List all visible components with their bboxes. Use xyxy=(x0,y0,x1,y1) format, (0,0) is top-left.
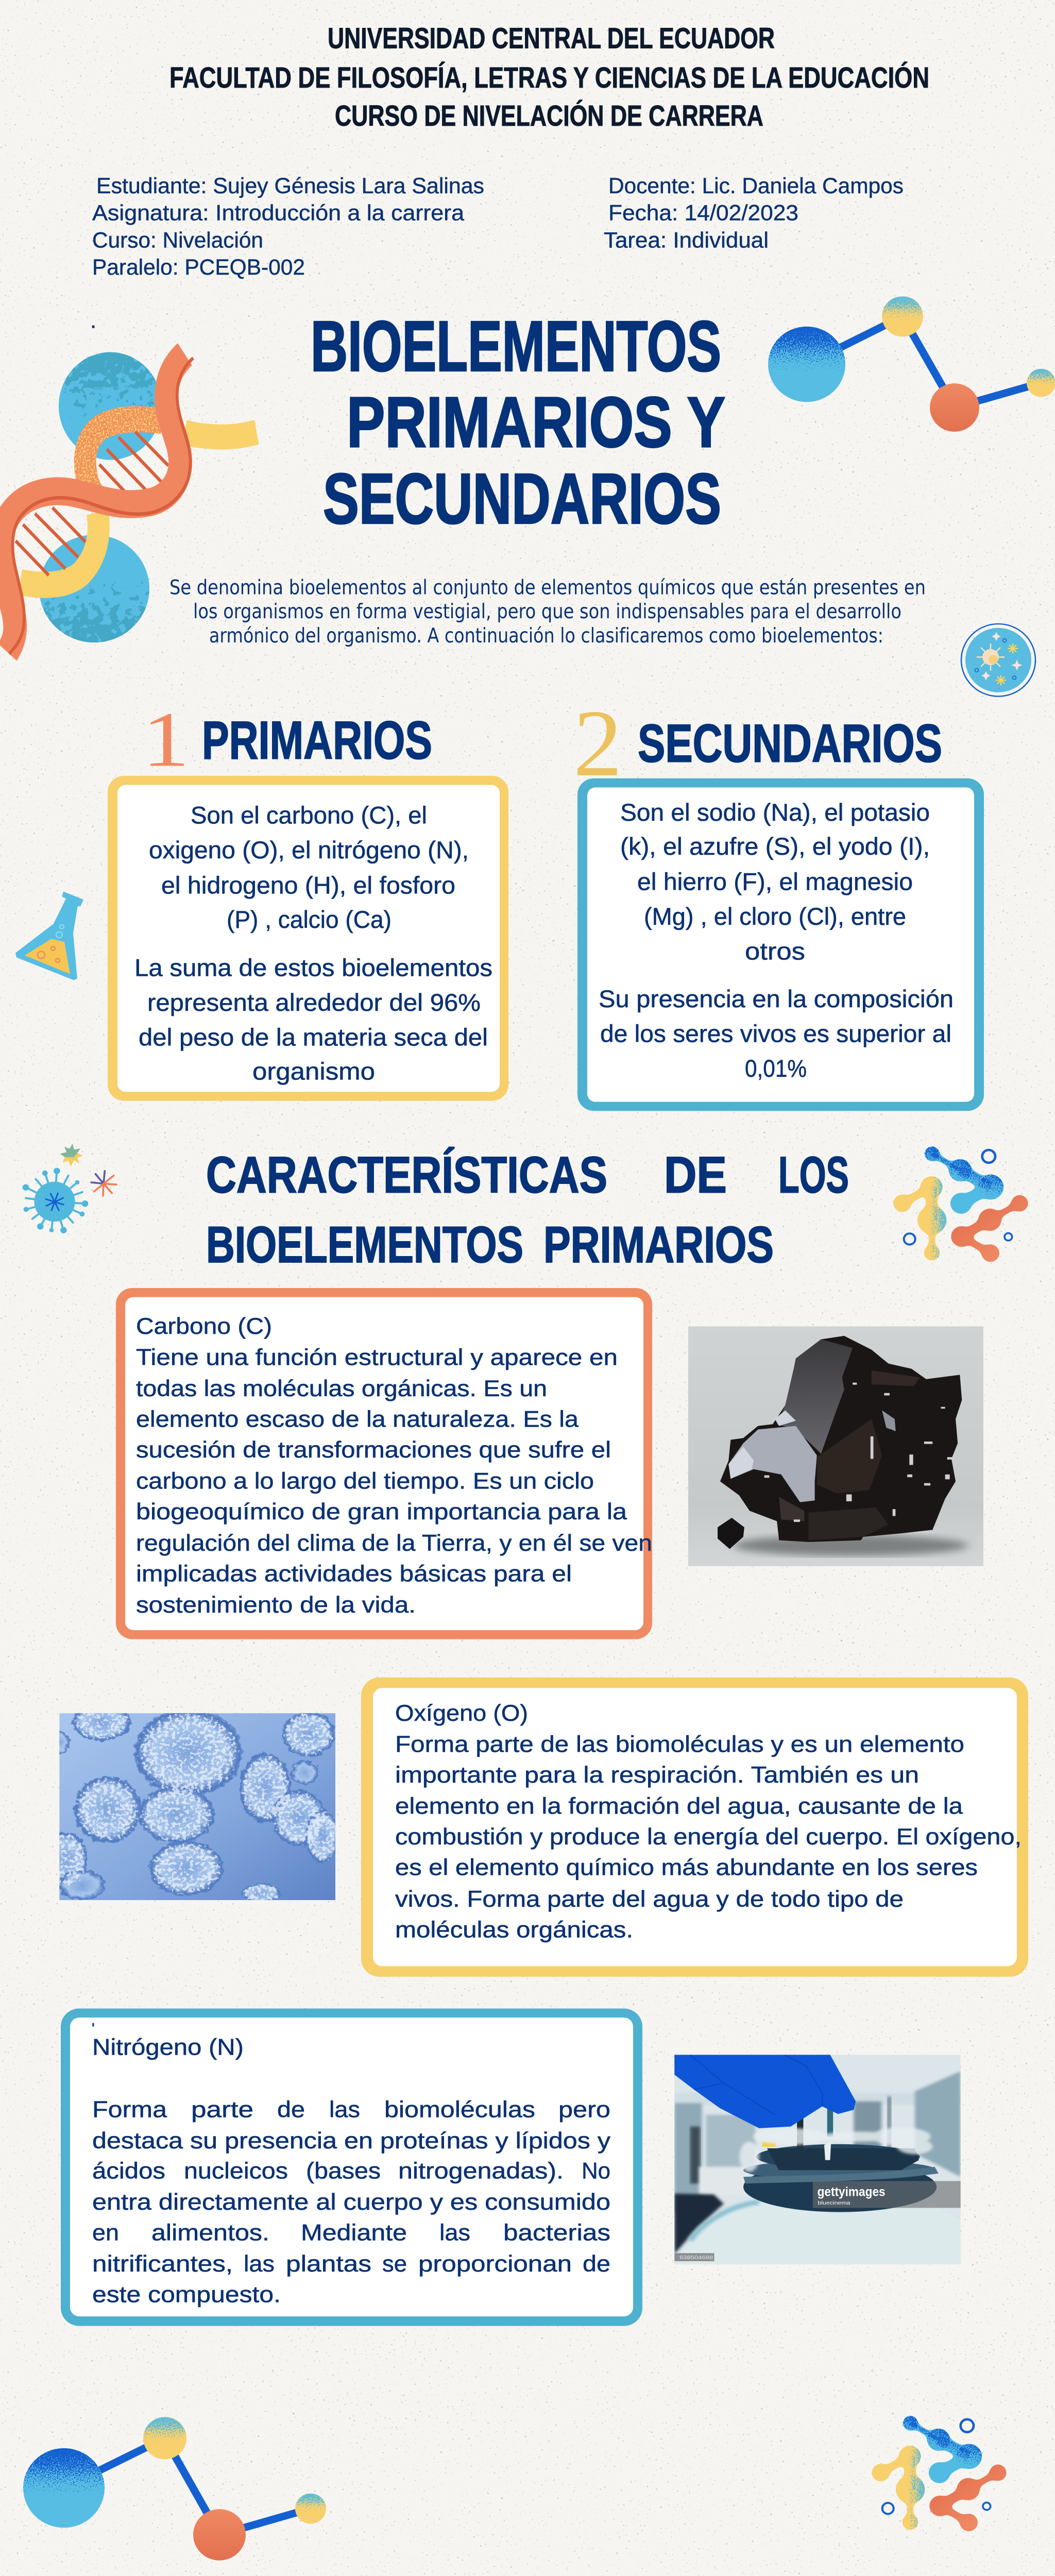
photo: nitrogen lab: bluecinema xyxy=(818,2200,850,2206)
panel: oxígeno: Oxígeno (O) xyxy=(395,1700,528,1726)
panel: nitrógeno: entra directamente al cuerpo y es consumido xyxy=(92,2189,610,2215)
title xyxy=(311,306,725,538)
panel: primarios: representa alrededor del 96% xyxy=(147,989,481,1016)
panel: primarios: del peso de la materia seca del xyxy=(139,1024,488,1051)
panel: secundarios: Son el sodio (Na), el potasio xyxy=(620,799,930,826)
panel: nitrógeno: nitrogenadas). xyxy=(398,2158,564,2183)
panel: carbono: todas las moléculas orgánicas. Es un xyxy=(136,1375,547,1401)
panel: primarios: Son el carbono (C), el xyxy=(191,802,427,829)
panel: carbono: sucesión de transformaciones que sufre el xyxy=(136,1437,611,1463)
photo: nitrogen lab xyxy=(674,2055,961,2264)
panel: carbono: elemento escaso de la naturaleza. Es la xyxy=(136,1406,579,1432)
photo: nitrogen lab: 638504688 xyxy=(679,2255,713,2261)
panel: oxígeno: combustión y produce la energía del cuerpo. El oxígeno, xyxy=(395,1824,1022,1850)
panel: carbono: biogeoquímico de gran importancia para la xyxy=(136,1499,627,1524)
header: institution: UNIVERSIDAD CENTRAL DEL ECUADOR xyxy=(328,22,775,55)
panel: nitrógeno: plantas xyxy=(286,2251,371,2277)
panel: nitrógeno: las xyxy=(244,2251,275,2277)
heading: características: BIOELEMENTOS xyxy=(206,1216,523,1274)
heading: primarios: PRIMARIOS xyxy=(202,711,432,770)
panel: primarios: el hidrogeno (H), el fosforo xyxy=(161,872,455,899)
title: PRIMARIOS Y xyxy=(347,382,725,462)
panel: nitrógeno: de xyxy=(277,2096,305,2122)
panel: secundarios: el hierro (F), el magnesio xyxy=(637,869,913,895)
panel: nitrógeno: (bases xyxy=(306,2158,381,2183)
number 1: 1 xyxy=(142,697,190,783)
panel: carbono: sostenimiento de la vida. xyxy=(136,1591,416,1618)
panel: carbono: implicadas actividades básicas para el xyxy=(136,1561,572,1586)
student details xyxy=(92,174,484,280)
number 2: 2 xyxy=(573,690,622,796)
panel: carbono: carbono a lo largo del tiempo. Es un ciclo xyxy=(136,1468,594,1494)
panel: nitrógeno: ácidos xyxy=(92,2158,165,2183)
panel: secundarios: (k), el azufre (S), el yodo (I), xyxy=(620,834,930,860)
icon: DNA helix xyxy=(1,352,257,654)
heading: secundarios: SECUNDARIOS xyxy=(638,714,942,773)
panel: nitrógeno: Mediante xyxy=(301,2219,407,2246)
panel: primarios: (P) , calcio (Ca) xyxy=(227,906,392,934)
header: institution xyxy=(169,22,929,132)
panel: nitrógeno: nitrificantes, xyxy=(92,2251,233,2277)
stray dot: . xyxy=(90,309,96,333)
panel: primarios: La suma de estos bioelementos xyxy=(134,955,492,981)
panel: oxígeno: Forma parte de las biomoléculas y es un elemento xyxy=(395,1731,964,1757)
panel: nitrógeno: bacterias xyxy=(503,2219,610,2246)
panel: nitrógeno: las xyxy=(329,2096,360,2122)
heading: características: DE xyxy=(664,1147,727,1204)
heading: características: LOS xyxy=(778,1147,849,1204)
header: institution: CURSO DE NIVELACIÓN DE CARRERA xyxy=(335,100,763,132)
student details: Estudiante: Sujey Génesis Lara Salinas xyxy=(96,174,484,198)
icon: molecule cluster xyxy=(893,1146,1028,1262)
panel: nitrógeno: proporcionan xyxy=(418,2251,572,2277)
panel: nitrógeno: este compuesto. xyxy=(92,2281,281,2308)
panel: secundarios: Su presencia en la composición xyxy=(599,986,954,1013)
panel: carbono: Tiene una función estructural y aparece en xyxy=(136,1344,618,1370)
panel: nitrógeno: No xyxy=(582,2158,610,2183)
panel: oxígeno: moléculas orgánicas. xyxy=(395,1917,633,1943)
panel: oxígeno: vivos. Forma parte del agua y de todo tipo de xyxy=(395,1886,904,1912)
student details: Curso: Nivelación xyxy=(92,228,263,252)
panel: secundarios: (Mg) , el cloro (Cl), entre xyxy=(644,903,906,930)
icon: molecule cluster bottom right xyxy=(872,2416,1007,2531)
teacher details: Docente: Lic. Daniela Campos xyxy=(608,174,904,198)
panel: nitrógeno: se xyxy=(382,2251,407,2277)
panel: secundarios: de los seres vivos es superior al xyxy=(600,1021,951,1047)
panel: nitrógeno: biomoléculas xyxy=(384,2096,535,2122)
student details: Asignatura: Introducción a la carrera xyxy=(92,201,465,226)
title: BIOELEMENTOS xyxy=(311,306,721,386)
teacher details xyxy=(604,174,904,252)
panel: primarios: organismo xyxy=(252,1058,375,1086)
student details: Paralelo: PCEQB-002 xyxy=(92,256,305,280)
photo: carbon rock xyxy=(688,1326,983,1566)
panel: nitrógeno: pero xyxy=(558,2096,610,2122)
panel: nitrógeno: de xyxy=(583,2251,610,2277)
icon: molecule bottom left xyxy=(23,2417,326,2561)
panel: secundarios xyxy=(577,778,984,1111)
panel: nitrógeno: Nitrógeno (N) xyxy=(92,2034,244,2060)
panel: oxígeno: elemento en la formación del agua, causante de la xyxy=(395,1793,963,1819)
icon: molecule top right xyxy=(768,296,1055,432)
intro paragraph: Se denomina bioelementos al conjunto de elementos químicos que están presentes en xyxy=(169,576,926,599)
heading: características: CARACTERÍSTICAS xyxy=(206,1147,607,1204)
panel: nitrógeno: ' xyxy=(92,2021,95,2037)
heading: características xyxy=(206,1147,849,1274)
panel: nitrógeno: destaca su presencia en proteínas y lípidos y xyxy=(92,2127,610,2154)
panel: nitrógeno: las xyxy=(439,2219,470,2246)
photo: nitrogen lab: gettyimages xyxy=(818,2185,886,2199)
panel: primarios xyxy=(108,776,508,1101)
icon: virus and stars xyxy=(23,1144,116,1233)
panel: primarios: oxigeno (O), el nitrógeno (N), xyxy=(149,837,469,864)
panel: secundarios: 0,01% xyxy=(745,1055,807,1082)
title: SECUNDARIOS xyxy=(323,459,721,538)
intro paragraph: armónico del organismo. A continuación lo clasificaremos como bioelementos: xyxy=(209,624,883,648)
panel: secundarios: otros xyxy=(745,938,805,965)
intro paragraph xyxy=(169,576,926,648)
teacher details: Fecha: 14/02/2023 xyxy=(608,201,798,226)
panel: oxígeno: importante para la respiración. También es un xyxy=(395,1761,919,1788)
icon: flask xyxy=(15,891,83,980)
panel: oxígeno: es el elemento químico más abundante en los seres xyxy=(395,1854,978,1880)
panel: carbono: Carbono (C) xyxy=(136,1313,272,1339)
panel: nitrógeno: en xyxy=(92,2219,119,2246)
intro paragraph: los organismos en forma vestigial, pero que son indispensables para el desarrollo xyxy=(193,600,901,623)
panel: nitrógeno: alimentos. xyxy=(151,2219,269,2246)
panel: nitrógeno: Forma xyxy=(92,2096,167,2122)
panel: nitrógeno: nucleicos xyxy=(184,2158,288,2183)
teacher details: Tarea: Individual xyxy=(604,228,769,252)
icon: petri dish xyxy=(961,624,1035,697)
panel: carbono: regulación del clima de la Tierra, y en él se ven xyxy=(136,1530,652,1556)
panel: carbono xyxy=(116,1288,652,1639)
panel: oxígeno xyxy=(361,1677,1028,1977)
photo: water bubbles xyxy=(59,1713,336,1900)
panel: nitrógeno xyxy=(61,2008,642,2326)
heading: características: PRIMARIOS xyxy=(543,1216,774,1274)
panel: nitrógeno: parte xyxy=(191,2096,253,2122)
